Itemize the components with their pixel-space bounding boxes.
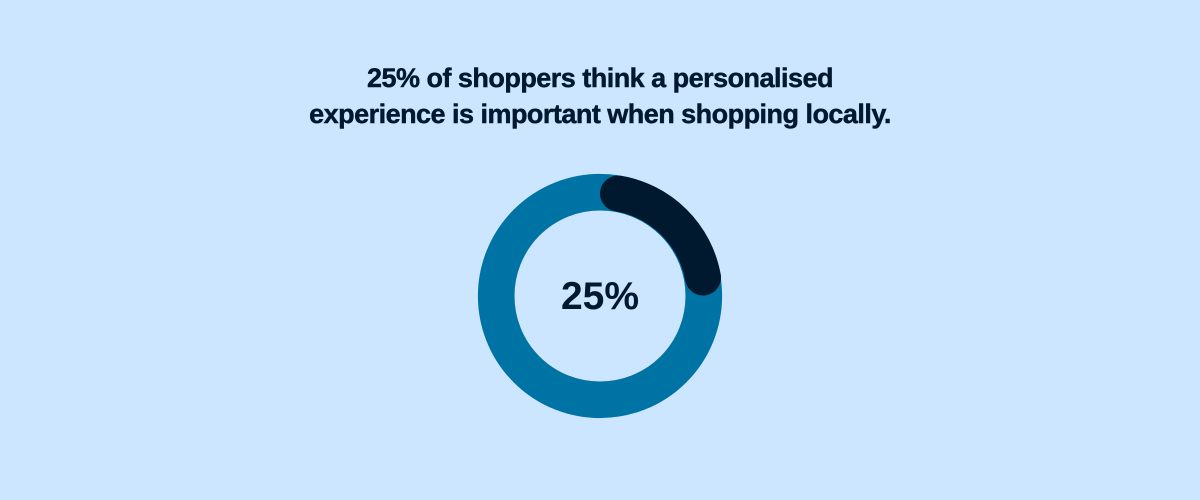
- title: 25% of shoppers think a personalised: [367, 63, 833, 93]
- donut track: remaining 75%: [496, 192, 704, 400]
- center value label: 25%: [561, 275, 639, 318]
- title: experience is important when shopping locally.: [309, 99, 891, 129]
- donut highlighted arc: 25%: [618, 194, 703, 278]
- title: [309, 63, 891, 129]
